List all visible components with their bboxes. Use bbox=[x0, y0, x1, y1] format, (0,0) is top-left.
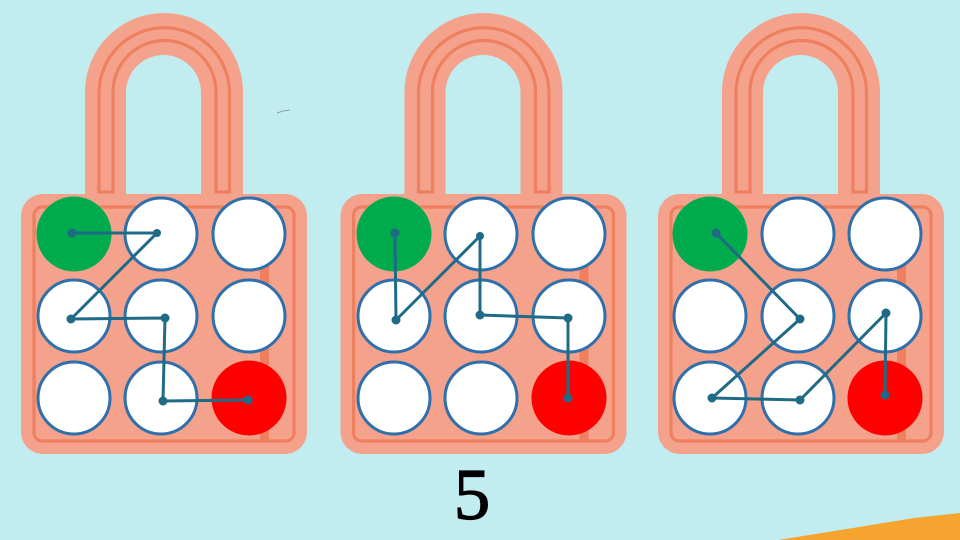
lock body bbox=[658, 194, 944, 454]
route path bbox=[66, 228, 252, 406]
shackle bbox=[404, 13, 562, 200]
route path bbox=[390, 228, 572, 402]
padlock 2 bbox=[340, 13, 626, 454]
number label: 5 bbox=[454, 454, 490, 535]
dot grid bbox=[36, 196, 286, 436]
padlock 1 bbox=[21, 13, 307, 454]
shackle bbox=[85, 13, 243, 200]
route path bbox=[708, 228, 890, 404]
lock body bbox=[21, 194, 307, 454]
shackle bbox=[722, 13, 880, 200]
dot grid bbox=[356, 196, 606, 436]
dot grid bbox=[672, 196, 922, 436]
corner accent: orange wedge bbox=[778, 513, 960, 540]
lock body bbox=[340, 194, 626, 454]
speck bbox=[277, 110, 290, 113]
padlock 3 bbox=[658, 13, 944, 454]
